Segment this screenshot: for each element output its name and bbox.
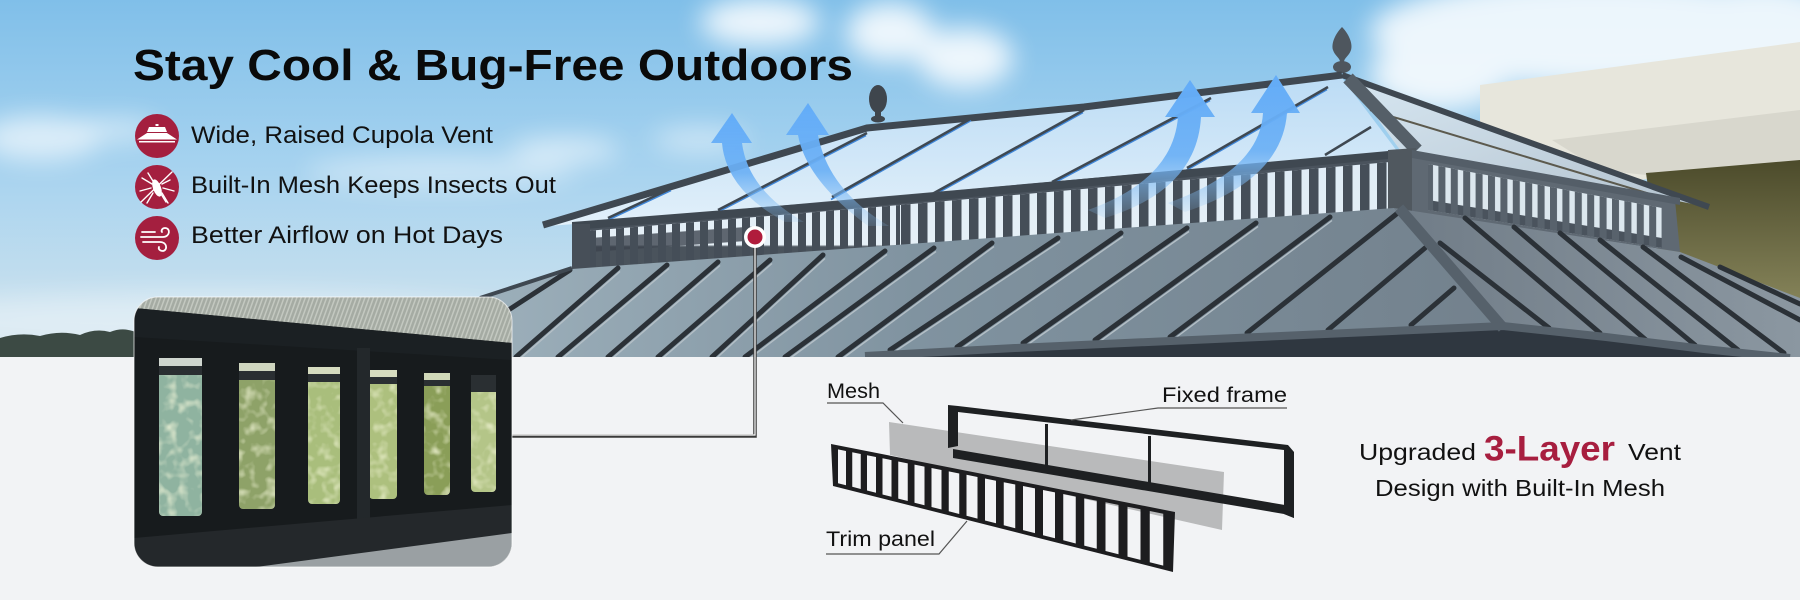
title: Stay Cool & Bug-Free Outdoors bbox=[133, 41, 853, 90]
seam highlights bbox=[518, 220, 1332, 360]
roof under-eave shadow bbox=[860, 328, 1790, 358]
feature 3: airflow bbox=[135, 216, 503, 260]
glass roof: front panel bbox=[548, 78, 1400, 226]
heading: 3-layer vent design: 3-Layer bbox=[1484, 430, 1615, 468]
airflow arrow 1 bbox=[711, 113, 804, 222]
fixed frame layer bbox=[948, 405, 1294, 518]
glass roof: side panel bbox=[1350, 80, 1703, 206]
icon: crossed mosquito bbox=[135, 165, 179, 209]
heading: 3-layer vent design: Upgraded bbox=[1359, 439, 1476, 465]
tree line on horizon bbox=[0, 329, 140, 358]
sky photo background bbox=[0, 0, 1800, 358]
feature 2: insect mesh bbox=[135, 165, 556, 209]
standing seams bbox=[490, 212, 1800, 357]
photo centre mullion bbox=[357, 348, 370, 520]
roof hip and eave strips bbox=[480, 208, 1790, 358]
label: trim panel: Trim panel bbox=[826, 528, 935, 551]
finial: left bbox=[869, 85, 887, 122]
window 3 bbox=[308, 367, 340, 504]
feature text: Better Airflow on Hot Days bbox=[191, 222, 503, 249]
lower frame band bbox=[134, 505, 512, 567]
label: mesh: Mesh bbox=[827, 380, 880, 403]
trim panel layer bbox=[831, 444, 1175, 572]
glass roof framing bbox=[543, 75, 1709, 225]
roof sliver at the top of the photo bbox=[134, 297, 512, 343]
window 6 bbox=[471, 375, 496, 492]
airflow arrow 3 bbox=[1088, 80, 1215, 218]
callout marker dot bbox=[744, 226, 766, 248]
photo panel border bbox=[134, 297, 512, 567]
heading: 3-layer vent design bbox=[1359, 430, 1682, 501]
label: trim panel bbox=[826, 521, 967, 554]
lower light background bbox=[0, 357, 1800, 600]
building behind gazebo bbox=[1480, 42, 1800, 320]
feature text: Built-In Mesh Keeps Insects Out bbox=[191, 172, 556, 199]
vent: side face bbox=[1412, 150, 1680, 252]
heading: 3-layer vent design: Design with Built-In Mesh bbox=[1375, 475, 1665, 501]
window 2 bbox=[239, 363, 275, 509]
icon: cupola bbox=[135, 114, 179, 158]
feature 1: cupola vent bbox=[135, 114, 493, 158]
finial: right bbox=[1332, 27, 1352, 73]
mesh layer bbox=[889, 422, 1224, 530]
upper frame band bbox=[134, 308, 512, 343]
label: fixed frame bbox=[1071, 384, 1287, 420]
diagram: exploded vent layers bbox=[831, 405, 1294, 572]
airflow arrow 2 bbox=[786, 103, 889, 226]
window 5 bbox=[424, 373, 450, 495]
panel: vent close-up photo bbox=[134, 297, 512, 567]
icon: wind bbox=[135, 216, 179, 260]
window 1 bbox=[159, 358, 202, 516]
label: mesh bbox=[827, 380, 903, 423]
metal roof bbox=[440, 208, 1800, 360]
vent: front face bbox=[572, 148, 1416, 272]
callout connector line bbox=[512, 240, 755, 436]
heading: 3-layer vent design: Vent bbox=[1628, 439, 1682, 465]
window 4 bbox=[369, 370, 397, 499]
label: fixed frame: Fixed frame bbox=[1162, 384, 1287, 407]
light sliver at the bottom of the photo bbox=[256, 533, 512, 567]
airflow arrow 4 bbox=[1168, 75, 1300, 212]
feature text: Wide, Raised Cupola Vent bbox=[191, 122, 493, 149]
